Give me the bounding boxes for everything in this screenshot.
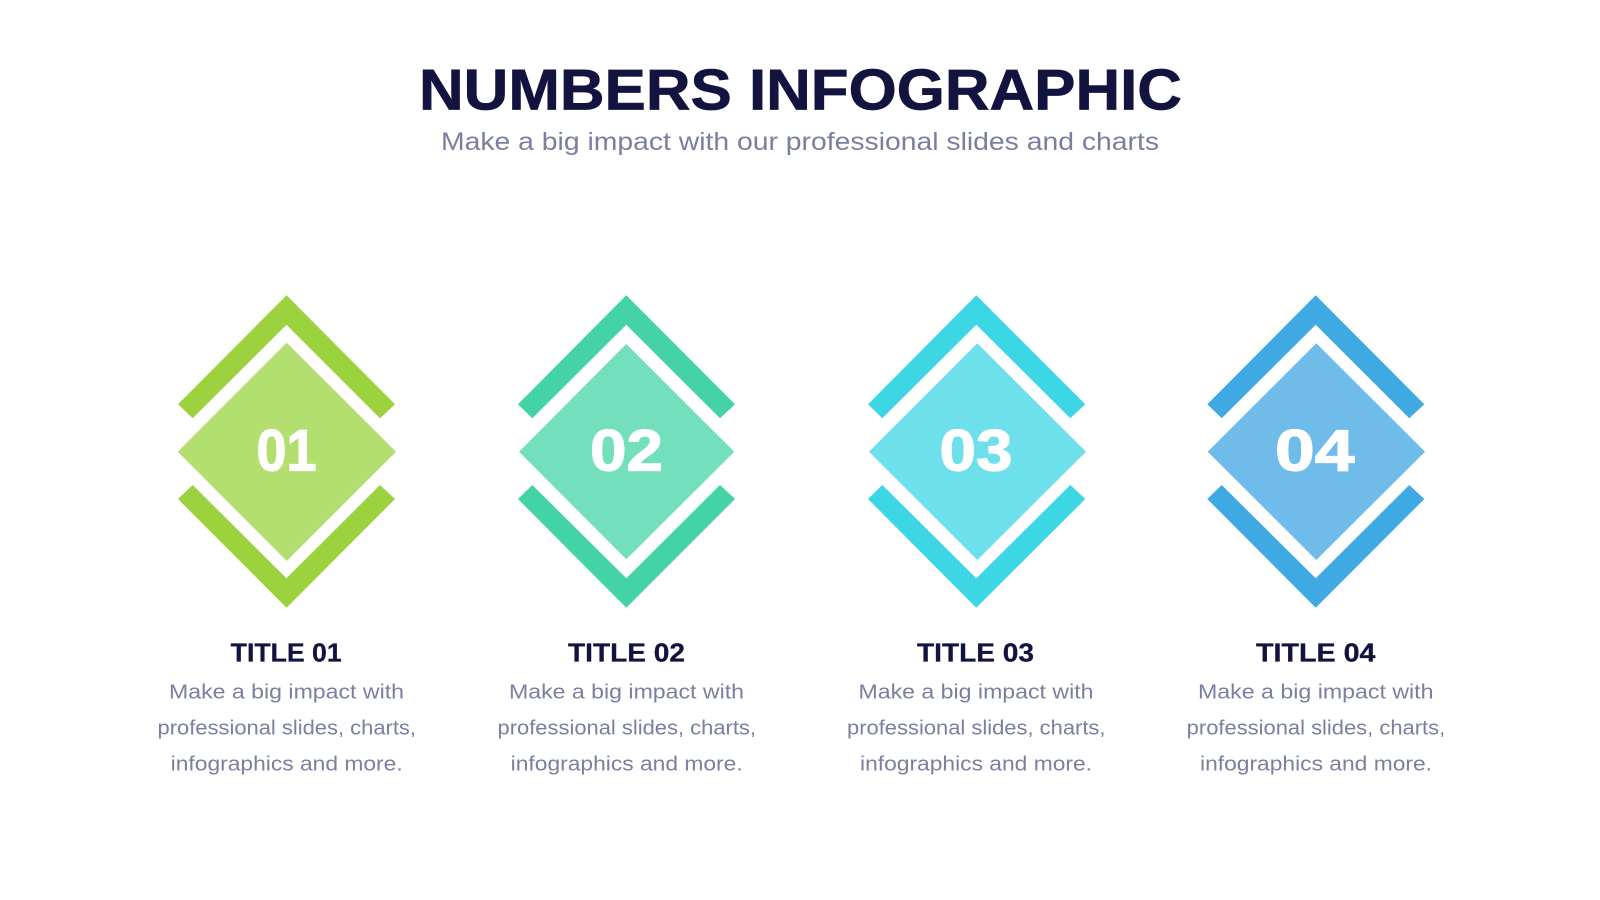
panel: item 03: [847, 295, 1106, 776]
title: NUMBERS INFOGRAPHIC: [419, 58, 1182, 122]
text block 02: infographics and more.: [511, 753, 743, 776]
panel: item 02: [498, 295, 756, 776]
text block 02: professional slides, charts,: [498, 716, 756, 739]
number 03: 03: [940, 419, 1012, 484]
number 04: 04: [1275, 419, 1354, 484]
text block 03: infographics and more.: [860, 753, 1092, 776]
panel: item 04: [1187, 295, 1445, 776]
text block 01: Make a big impact with: [169, 680, 404, 703]
text block 01: professional slides, charts,: [158, 716, 416, 739]
icon: diamond 04: [1207, 295, 1425, 608]
text block 04: [1187, 680, 1445, 776]
subtitle: Make a big impact with our professional slides and charts: [441, 128, 1159, 156]
text block 04: Make a big impact with: [1198, 680, 1434, 703]
text block 02: Make a big impact with: [509, 680, 744, 703]
text block 02: [498, 680, 756, 776]
text block 03: professional slides, charts,: [847, 716, 1106, 739]
number 02: 02: [590, 419, 663, 484]
icon: diamond 01: [178, 295, 396, 608]
panel: item 01: [158, 295, 416, 776]
text block 04: professional slides, charts,: [1187, 716, 1445, 739]
text block 03: [847, 680, 1106, 776]
text block 03: Make a big impact with: [858, 680, 1094, 703]
heading: title 03: TITLE 03: [917, 640, 1034, 668]
heading: title 04: TITLE 04: [1256, 640, 1376, 668]
icon: diamond 03: [868, 295, 1086, 608]
text block 01: [158, 680, 416, 776]
icon: diamond 02: [518, 295, 735, 608]
heading: title 02: TITLE 02: [568, 640, 685, 668]
heading: title 01: TITLE 01: [231, 640, 342, 668]
text block 01: infographics and more.: [171, 753, 403, 776]
number 01: 01: [256, 419, 316, 484]
text block 04: infographics and more.: [1200, 753, 1432, 776]
